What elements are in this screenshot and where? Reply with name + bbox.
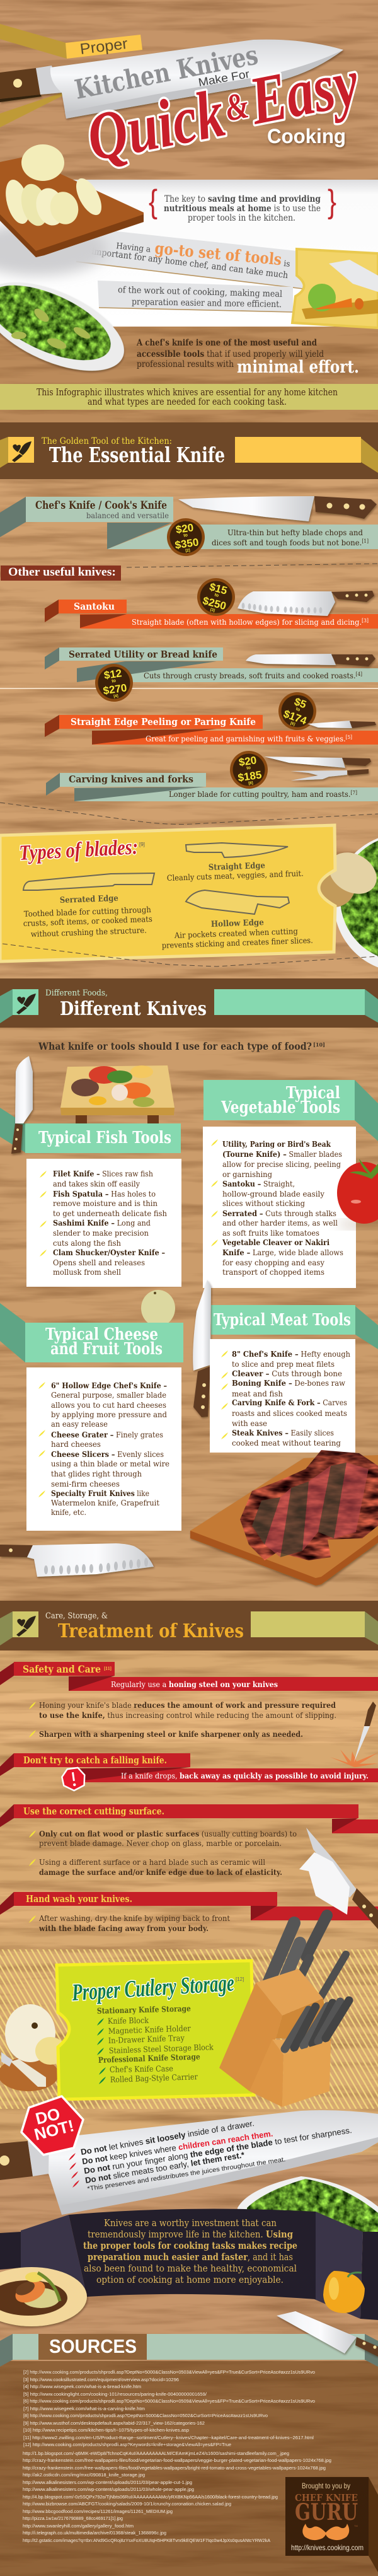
- storage list: Rolled Bag-Style Carrier: [110, 2072, 198, 2084]
- sources list: http://www.swanleyhill.com/gallery/gallery_food.htm: [23, 2524, 134, 2529]
- do not list: Do not slice meats too early, let them rest.*: [84, 2150, 246, 2185]
- panel: cheese and fruit tools list: an easy release: [51, 1420, 108, 1429]
- intro ribbon: go-to set of tools: go-to set of tools: [154, 239, 282, 269]
- panel: fish tools list: mollusk from shell: [53, 1268, 121, 1277]
- straight edge text: [167, 861, 304, 883]
- honing bullets: Sharpen with a sharpening steel or knife sharpener only as needed.: [39, 1729, 303, 1739]
- knife entry: santoku: Santoku: [74, 601, 115, 612]
- panel: fish tools list: to get underneath delicate fish: [53, 1209, 167, 1218]
- panel: cheese and fruit tools list: by applying more pressure and: [51, 1410, 167, 1419]
- section header: Treatment of Knives: Care, Storage, &: [45, 1611, 108, 1621]
- panel: cheese and fruit tools list: semi-firm cheeses: [51, 1480, 120, 1488]
- panel: meat tools list: Steak Knives – Easily slices: [232, 1429, 334, 1437]
- knife entry: serrated utility or bread knife: Cuts through crusty breads, soft fruits and cooked roasts.: [144, 671, 375, 680]
- sources list: http://4.bp.blogspot.com/-0z5SQPx792o/TjNbts06RuI/AAAAAAAAAMc/yRXBKNp56AA/s1600/black-forest-country-bread.jpg: [23, 2495, 278, 2500]
- sashimi on wooden board: [60, 1065, 175, 1123]
- price badge: [164, 516, 207, 559]
- question heading: [10]: [313, 1041, 325, 1048]
- intro ribbon: go-to set of tools: Having a: [116, 241, 151, 255]
- text: chef's knife minimal effort: A chef's knife is one of the most useful and: [136, 338, 317, 348]
- sources ribbon: [0, 2334, 378, 2367]
- panel: vegetable tools list: as soft fruits like tomatoes: [222, 1229, 319, 1238]
- ribbon and header: Typical Fish Tools: Typical Fish Tools: [38, 1128, 171, 1147]
- panel: vegetable tools list: Serrated – Cuts through stalks: [222, 1209, 336, 1218]
- ribbon and header: Typical Cheese and Fruit Tools: [0, 1303, 183, 1362]
- price badge: [8]: [248, 781, 253, 786]
- dashed cut line: [0, 803, 378, 825]
- storage list: Stainless Steel Storage Block: [109, 2042, 214, 2055]
- knife entry: carving knives and forks: Carving knives and forks: [69, 774, 193, 785]
- panel: cheese and fruit tools list: hard cheeses: [51, 1440, 101, 1449]
- band: infographic description: [0, 384, 378, 410]
- serrated edge text: [23, 894, 152, 939]
- salad behind closing banner: [238, 2176, 378, 2235]
- sources list: http://crazy-frankenstein.com/free-wallpapers-files/food/vegetables-wallpapers/bright-red-tomato-and-cross-vegetables-wallpapers-1024x768.jpg: [23, 2466, 326, 2471]
- price badge: $350: [174, 536, 200, 551]
- honing bullets: [29, 1700, 336, 1739]
- panel: cheese and fruit tools list: Watermelon knife, Grapefruit: [51, 1499, 159, 1507]
- price badge: $5: [292, 695, 308, 711]
- sources list: http://www.alkalinesisters.com/wp-content/uploads/2011/03/pear-apple-cut-1.jpg: [23, 2481, 192, 2485]
- sources list: http://1.bp.blogspot.com/-q6MIK-eWDp8/TchnoCqK4uI/AAAAAAAAALM/CEAmKjmLeZ4/s1600/sashimi-standleefamily.com_.jpeg: [23, 2452, 289, 2456]
- panel: fish tools list: Filet Knife – Slices raw fish: [53, 1169, 153, 1178]
- icon: mustache: [302, 2524, 349, 2540]
- panel: vegetable tools list: Utility, Paring or Bird's Beak: [222, 1140, 331, 1149]
- sources list: [23, 2370, 331, 2543]
- surface bullets: prevent blade damage. Never chop on glass, marble or porcelain.: [39, 1838, 282, 1848]
- knife entry: straight edge peeling or paring knife: Straight Edge Peeling or Paring Knife: [71, 716, 256, 728]
- panel: vegetable tools list: transport of chopped items: [222, 1268, 324, 1277]
- title text: Kitchen Knives: [72, 39, 260, 105]
- panel: vegetable tools list: (Tourne Knife) – Smaller blades: [222, 1150, 342, 1159]
- knife illustration: [307, 721, 376, 728]
- panel: vegetable tools list: Santoku – Straight,: [222, 1180, 295, 1188]
- intro ribbon: go-to set of tools: [76, 227, 303, 312]
- panel: fish tools list: remove moisture and is thin: [53, 1199, 158, 1208]
- surface bullets: damage the surface and/or knife edge due to lack of elasticity.: [39, 1867, 282, 1877]
- care: safety and care: Regularly use a honing steel on your knives: [111, 1680, 278, 1689]
- sources list: http://www.bizbrowse.com/ABCFGT/cooking/salads/2009-10/1/crunchy.coronation.chicken.salad.jpg: [23, 2502, 231, 2507]
- panel: meat tools list: Boning Knife – De-bones raw: [232, 1379, 346, 1388]
- sources list: http://ak2.ostkcdn.com/img/mxc/090818_knife_storage.jpg: [23, 2473, 145, 2478]
- straight edge text: Cleanly cuts meat, veggies, and fruit.: [167, 868, 304, 883]
- panel: cheese and fruit tools list: Cheese Slicers – Evenly slices: [51, 1450, 164, 1459]
- cleaver over sources ribbon: [277, 2311, 378, 2357]
- price badge: $15: [208, 581, 229, 597]
- panel: cheese and fruit tools list: Specialty Fruit Knives like: [51, 1489, 149, 1498]
- price badge: [273, 687, 321, 735]
- serrated edge text: Toothed blade for cutting through: [24, 905, 151, 919]
- panel: cheese and fruit tools list: allows you to cut hard cheeses: [51, 1401, 166, 1410]
- sign: do not: DO: [33, 2104, 62, 2128]
- panel: vegetable tools list: Vegetable Cleaver or Nakiri: [222, 1238, 329, 1247]
- price badge: [93, 661, 135, 704]
- knife entry: carving knives and forks: [46, 748, 378, 801]
- price badge: to: [183, 533, 188, 538]
- panel: meat tools list: with ease: [232, 1419, 267, 1428]
- serrated edge text: crusts, soft items, or cooked meats: [23, 914, 152, 928]
- knife entry: chef's knife: balanced and versatile: [86, 511, 169, 520]
- band: infographic description: and what types are needed for each cooking task.: [88, 397, 287, 407]
- price badge: to: [112, 679, 116, 683]
- yellow bell pepper: [323, 2271, 365, 2313]
- price badge: [193, 574, 239, 620]
- title text: [72, 39, 365, 176]
- halved pear and knife on board: [0, 2004, 66, 2091]
- intro callout: the key to saving time: The key to saving time and providing: [164, 194, 321, 204]
- ribbon and header: Typical Cheese and Fruit Tools: Typical Cheese: [45, 1325, 158, 1344]
- text: chef's knife minimal effort: accessible tools that if used properly will yield: [137, 349, 324, 359]
- panel: vegetable tools list: Knife – Large, wide blade allows: [222, 1248, 343, 1257]
- icon: serrated edge knife: [23, 873, 154, 890]
- price badge: [2]: [185, 548, 190, 553]
- knife entry: straight edge peeling or paring knife: Great for peeling and garnishing with fruits & veggies.: [146, 734, 365, 743]
- knife entry: straight edge peeling or paring knife: [45, 687, 378, 745]
- care: correct cutting surface: Use the correct cutting surface.: [23, 1806, 164, 1817]
- closing banner: Knives are a worthy investment that can: [104, 2219, 277, 2229]
- pear: [141, 1290, 175, 1326]
- hollow edge text: [162, 918, 313, 950]
- panel: meat tools list: cooked meat without tearing: [232, 1439, 341, 1448]
- closing banner: [0, 2209, 378, 2320]
- knife entry: chef's knife: [0, 496, 378, 559]
- santoku knife lower left: [0, 1543, 154, 1577]
- surface bullets: [29, 1829, 297, 1877]
- intro callout: the key to saving time: {: [149, 183, 158, 220]
- sources list: [3] http://www.cooksillustrated.com/equipment/overview.asp?docid=10296: [23, 2378, 179, 2382]
- knife illustration: [178, 496, 377, 521]
- knife entry: chef's knife: Ultra-thin but hefty blade chops and: [227, 528, 363, 537]
- text: chef's knife minimal effort: professional results with: [137, 359, 234, 369]
- hollow edge text: prevents sticking and creates finer slices.: [162, 936, 313, 950]
- storage list: Magnetic Knife Holder: [108, 2023, 191, 2036]
- panel: meat tools list: to slice and prep meat filets: [232, 1360, 335, 1369]
- knife illustration: [246, 654, 375, 666]
- sources list: [5] http://www.cookinglight.com/cooking-101/resources/paring-knife-00400000001659/: [23, 2393, 207, 2397]
- price badge: $20: [238, 754, 257, 769]
- storage list: [97, 2004, 214, 2084]
- logo: Chef Knife Guru: http://knives.cooking.com: [291, 2543, 364, 2552]
- closing banner: preparation much easier and faster, and it has: [88, 2252, 293, 2263]
- price badge: $185: [237, 769, 263, 784]
- wash bullet: with the blade facing away from your body.: [38, 1923, 209, 1933]
- panel: types of blades: [9]: [139, 842, 145, 847]
- sources list: http://www.bbcgoodfood.com/recipes/11261/images/11261_MEDIUM.jpg: [23, 2510, 173, 2514]
- knife entry: serrated utility or bread knife: [0, 647, 378, 704]
- knife illustration: [238, 591, 374, 616]
- sources list: [4] http://www.wisegeek.com/what-is-a-bread-knife.htm: [23, 2385, 141, 2389]
- knife entry: chef's knife: [1]: [362, 538, 369, 544]
- price badge: $250: [202, 595, 227, 612]
- closing banner: the proper tools for cooking tasks makes recipe: [83, 2241, 297, 2251]
- panel: meat tools list: meat and fish: [232, 1390, 283, 1398]
- panel: fish tools list: cuts along the fish: [53, 1239, 121, 1248]
- surface bullets: Only cut on flat wood or plastic surfaces (usually cutting boards) to: [39, 1829, 297, 1838]
- ribbon and header: Typical Cheese and Fruit Tools: and Fruit Tools: [50, 1340, 163, 1359]
- hatched storage background: [0, 1949, 378, 2109]
- panel: vegetable tools list: [203, 1127, 356, 1288]
- title text: &: [222, 84, 252, 129]
- sources list: [12] http://www.cooking.com/products/shprodli.asp?Keywords=knife+storage&ViewAll=yes&FP=True: [23, 2443, 231, 2447]
- knife entry: straight edge peeling or paring knife: [5]: [346, 734, 352, 740]
- section header: The Essential Knife: [0, 422, 378, 479]
- section header: Treatment of Knives: Treatment of Knives: [58, 1620, 244, 1642]
- icon: hollow edge knife: [186, 890, 289, 914]
- knife entry: serrated utility or bread knife: [4]: [356, 671, 362, 677]
- closing banner: also been found to make the healthy, economical: [84, 2264, 297, 2274]
- panel: meat tools list: Carving Knife & Fork – Carves: [232, 1398, 347, 1407]
- intro ribbon: go-to set of tools: important for any home chef, and can take much: [91, 247, 289, 281]
- price badge: $174: [282, 707, 309, 727]
- storage list: Stationary Knife Storage: [97, 2004, 191, 2016]
- logo: Chef Knife Guru: Brought to you by: [302, 2481, 350, 2490]
- intro callout: the key to saving time: [149, 183, 336, 223]
- storage list: Chef's Knife Case: [110, 2063, 173, 2074]
- panel: vegetable tools list: or garnishing: [222, 1170, 272, 1179]
- text: chef's knife minimal effort: minimal effort.: [237, 357, 359, 377]
- panel: cheese and fruit tools list: General purpose, smaller blade: [51, 1391, 166, 1400]
- heading: other useful knives: [1, 564, 378, 581]
- steak on cutting board: [190, 1450, 378, 1586]
- icon: knife and heart: [16, 1616, 36, 1637]
- sign: do not: NOT!: [32, 2116, 76, 2144]
- panel: meat tools list: Cleaver – Cuts through bone: [232, 1369, 342, 1378]
- heading: other useful knives: Other useful knives:: [8, 566, 116, 579]
- panel: fish tools list: Fish Spatula – Has holes to: [53, 1190, 156, 1198]
- intro ribbon: go-to set of tools: of the work out of cooking, making meal: [118, 285, 283, 299]
- section header: Different Knives: [0, 978, 378, 1028]
- cutting board with onion: [0, 144, 144, 276]
- panel: proper cutlery storage: Proper Cutlery Storage: [71, 1970, 235, 2006]
- panel: proper cutlery storage: [12]: [236, 1976, 244, 1982]
- knife and fork illustration: [264, 757, 371, 780]
- panel: fish tools list: Sashimi Knife – Long and: [53, 1219, 151, 1227]
- intro callout: the key to saving time: }: [328, 183, 336, 220]
- logo: Chef Knife Guru: [285, 2477, 378, 2572]
- sources ribbon: SOURCES: [49, 2335, 137, 2357]
- price badge: [3]: [210, 608, 215, 613]
- care: don't catch a falling knife: Don't try to catch a falling knife.: [23, 1755, 167, 1766]
- knife entry: serrated utility or bread knife: Serrated Utility or Bread knife: [69, 649, 217, 660]
- price badge: $12: [103, 667, 122, 682]
- panel: vegetable tools list: and other harder items, as well: [222, 1219, 338, 1227]
- panel: cheese and fruit tools list: 6" Hollow Edge Chef's Knife –: [51, 1381, 167, 1390]
- knife entry: santoku: [3]: [362, 618, 369, 624]
- storage list: Professional Knife Storage: [98, 2051, 200, 2065]
- serrated edge text: without crushing the structure.: [31, 925, 147, 939]
- knife entry: chef's knife: dices soft and tough foods but not bone.: [212, 538, 372, 547]
- sources list: [6] http://www.cooking.com/products/shprodli.asp?DeptNo=5000&ClassNo=0509&ViewAll=yes&FP=True&CurSort=PriceAsc#axzz1sUs9URvo: [23, 2399, 315, 2404]
- price badge: [4]: [113, 694, 118, 699]
- panel: fish tools list: and takes skin off easily: [53, 1180, 140, 1188]
- surface bullets: Using a different surface or a hard blade such as ceramic will: [39, 1857, 265, 1867]
- panel: cheese and fruit tools list: knife, etc.: [51, 1508, 86, 1517]
- straight edge text: Straight Edge: [209, 861, 265, 873]
- section header: Different Knives: Different Knives: [60, 998, 207, 1020]
- care: hand wash your knives: Hand wash your knives.: [26, 1893, 132, 1905]
- wash bullet: [29, 1913, 230, 1933]
- price badge: $270: [102, 682, 128, 697]
- icon: knife and heart: [12, 441, 32, 462]
- section header: Treatment of Knives: [0, 1601, 378, 1651]
- price badge: to: [295, 707, 301, 712]
- knife wiped with towel: [299, 1828, 378, 1929]
- price badge: to: [246, 766, 251, 770]
- title text: Quick: [81, 76, 231, 176]
- wash bullet: After washing, dry the knife by wiping back to front: [38, 1913, 230, 1923]
- ribbon tag: Proper: [66, 35, 142, 59]
- sources list: [7] http://www.wisegeek.com/what-is-a-carving-knife.htm: [23, 2407, 145, 2411]
- panel: meat tools list: [210, 1339, 355, 1453]
- do not list: Do not run your finger along the edge of the blade to test for sharpness.: [83, 2125, 353, 2176]
- care: hand wash your knives: [0, 1892, 378, 1933]
- price badge: $20: [175, 521, 194, 536]
- intro ribbon: go-to set of tools: is: [284, 259, 290, 269]
- knife: do not tips: [0, 2110, 378, 2215]
- hollow edge text: Air pockets created when cutting: [174, 926, 298, 940]
- vertical knife: fish: [11, 1056, 33, 1154]
- price badge: [227, 748, 270, 791]
- section header: Different Knives: Different Foods,: [45, 989, 108, 998]
- ribbon and header: Typical Vegetable Tools: Typical: [286, 1084, 340, 1103]
- tomato: [337, 1159, 378, 1228]
- vertical knife: meat: [193, 1280, 211, 1417]
- yellow ticket: knife cutting carrot: [292, 249, 378, 328]
- ribbon and header: Typical Fish Tools: [0, 1108, 181, 1153]
- care: don't catch a falling knife: [0, 1753, 378, 1792]
- sources list: http://pizza.1w1w/2176790889_68cc469171[1].jpg: [23, 2517, 123, 2521]
- ribbon and header: Typical Meat Tools: [211, 1305, 378, 1349]
- logo: Chef Knife Guru: CHEF KNIFE: [295, 2492, 358, 2503]
- sources list: [10] http://www.recipetips.com/kitchen-tips/t--1075/types-of-kitchen-knives.asp: [23, 2428, 189, 2433]
- hollow edge text: Hollow Edge: [211, 918, 264, 929]
- sources list: [11] http://www2.zwilling.com/en-US/Product-Range--sortiment/Cutlery--knives/Chapter--kapitel/Care-and-treatment-of-knives--2617.html: [23, 2436, 314, 2440]
- text: chef's knife minimal effort: [136, 338, 359, 377]
- panel: cheese and fruit tools list: Cheese Grater – Finely grates: [51, 1430, 163, 1439]
- care: safety and care: [11]: [104, 1666, 112, 1671]
- price badge: to: [214, 593, 219, 598]
- section header: The Essential Knife: The Golden Tool of the Kitchen:: [42, 436, 172, 446]
- panel: meat tools list: roasts and slices cooked meats: [232, 1409, 347, 1418]
- intro callout: the key to saving time: nutritious meals at home is to use the: [164, 204, 321, 214]
- panel: vegetable tools list: allow for precise slicing, peeling: [222, 1160, 341, 1169]
- panel: fish tools list: Opens shell and releases: [53, 1258, 145, 1267]
- sources list: http://i.telegraph.co.uk/multimedia/archive/01368/steak_1368896c.jpg: [23, 2531, 166, 2536]
- salmon dinner plate: [0, 2267, 87, 2326]
- panel: types of blades: [0, 825, 335, 961]
- panel: fish tools list: Clam Shucker/Oyster Knife –: [53, 1248, 165, 1257]
- falling knife with impact burst: [330, 1702, 378, 1767]
- sources list: [8] http://www.cooking.com/products/shprodli.asp?DeptNo=5000&ClassNo=0502&CurSort=PriceAsc#axzz1sUs9URvo: [23, 2414, 268, 2418]
- storage list: In-Drawer Knife Tray: [108, 2033, 185, 2045]
- icon: straight edge knife: [186, 843, 288, 857]
- dashed cut line: [3, 944, 378, 966]
- care: correct cutting surface: [0, 1804, 378, 1877]
- panel: vegetable tools list: for easy chopping and easy: [222, 1258, 324, 1267]
- sources list: http://crazy-frankenstein.com/free-wallpapers-files/food/vegetarian-food-wallpapers/veggie-burger-plated-vegetarian-food-wallpapers-1024x768.jpg: [23, 2459, 331, 2463]
- panel: types of blades: Types of blades:: [18, 835, 139, 865]
- honing bullets: Honing your knife's blade reduces the amount of work and pressure required: [39, 1700, 336, 1710]
- panel: meat tools list: 8" Chef's Knife – Hefty enough: [232, 1350, 350, 1359]
- honing bullets: to use the knife, thus increasing control while reducing the amount of slipping.: [39, 1710, 336, 1720]
- icon: knife and heart: [16, 994, 36, 1014]
- do not list: *This preserves and redistributes the juices throughout the meat.: [87, 2156, 286, 2193]
- ribbon and header: Typical Vegetable Tools: [203, 1080, 378, 1141]
- intro callout: the key to saving time: proper tools in the kitchen.: [188, 213, 295, 223]
- sources list: [9] http://www.wusthof.com/desktopdefault.aspx/tabid-22/317_view-162/categories-162: [23, 2422, 205, 2426]
- question heading: What knife or tools should I use for each type of food?: [38, 1040, 312, 1052]
- chicken salad plate: [312, 833, 378, 972]
- panel: proper cutlery storage: [57, 1961, 254, 2099]
- panel: cheese and fruit tools list: that glides right through: [51, 1470, 142, 1478]
- knife block: [219, 1915, 349, 2107]
- panel: vegetable tools list: hollow-ground blade easily: [222, 1190, 324, 1198]
- sources list: [2] http://www.cooking.com/products/shprodli.asp?DeptNo=5000&ClassNo=0503&ViewAll=yes&FP=True&CurSort=PriceAsc#axzz1sUs9URvo: [23, 2370, 315, 2375]
- ribbon tag: Proper: Proper: [79, 35, 129, 58]
- ribbon and header: Typical Vegetable Tools: Vegetable Tools: [220, 1098, 340, 1117]
- logo: Chef Knife Guru: TM: [354, 2524, 358, 2527]
- closing banner: tremendously improve life in the kitchen. Using: [88, 2229, 293, 2240]
- logo: Chef Knife Guru: GURU: [295, 2499, 358, 2526]
- title knife: [0, 40, 343, 119]
- knife entry: santoku: Straight blade (often with hollow edges) for slicing and dicing.: [132, 618, 372, 627]
- serrated edge text: Serrated Edge: [60, 894, 118, 905]
- icon: warning sign: [61, 1767, 86, 1792]
- panel: fish tools list: [26, 1159, 181, 1287]
- closing banner: option of cooking at home more enjoyable.: [96, 2275, 284, 2285]
- storage list: Knife Block: [108, 2016, 149, 2026]
- section header: The Essential Knife: The Essential Knife: [49, 443, 225, 467]
- panel: cheese and fruit tools list: using a thin blade or metal wire: [51, 1459, 169, 1468]
- panel: fish tools list: slender to make precision: [53, 1229, 149, 1238]
- do not list: Do not keep knives where children can reach them.: [81, 2128, 273, 2166]
- do not list: Do not let knives sit loosely inside of a drawer.: [80, 2118, 255, 2157]
- sources list: http://t2.gstatic.com/images?q=tbn:ANd9GcQRoj8zYsxFoXU8UIqH5HPKBTvrx9kEQEW1F7Iqc0w4JpXs0qusANtcYRW2kA: [23, 2539, 270, 2543]
- do not list: [69, 2118, 353, 2193]
- price badge: [6]: [290, 722, 295, 727]
- intro ribbon: go-to set of tools: preparation easier and more efficient.: [132, 297, 282, 310]
- panel: vegetable tools list: slices without sticking: [222, 1199, 305, 1208]
- title text: Make For: [197, 67, 250, 89]
- knife entry: carving knives and forks: Longer blade for cutting poultry, ham and roasts.: [169, 789, 366, 799]
- knife entry: chef's knife: Chef's Knife / Cook's Knife: [35, 499, 167, 512]
- knife entry: santoku: [45, 574, 378, 629]
- panel: cheese and fruit tools list: [26, 1367, 181, 1531]
- knife entry: carving knives and forks: [7]: [351, 790, 357, 796]
- salad plate: [0, 264, 137, 389]
- care: safety and care: Safety and Care: [23, 1663, 101, 1675]
- sign: do not: [21, 2096, 83, 2155]
- care: safety and care: [0, 1662, 378, 1739]
- sources list: http://www.alkalinesisters.com/wp-content/uploads/2011/03/whole-pear-apple.jpg: [23, 2488, 194, 2492]
- ribbon behind title knife: [0, 24, 142, 127]
- title text: Cooking: [267, 125, 346, 148]
